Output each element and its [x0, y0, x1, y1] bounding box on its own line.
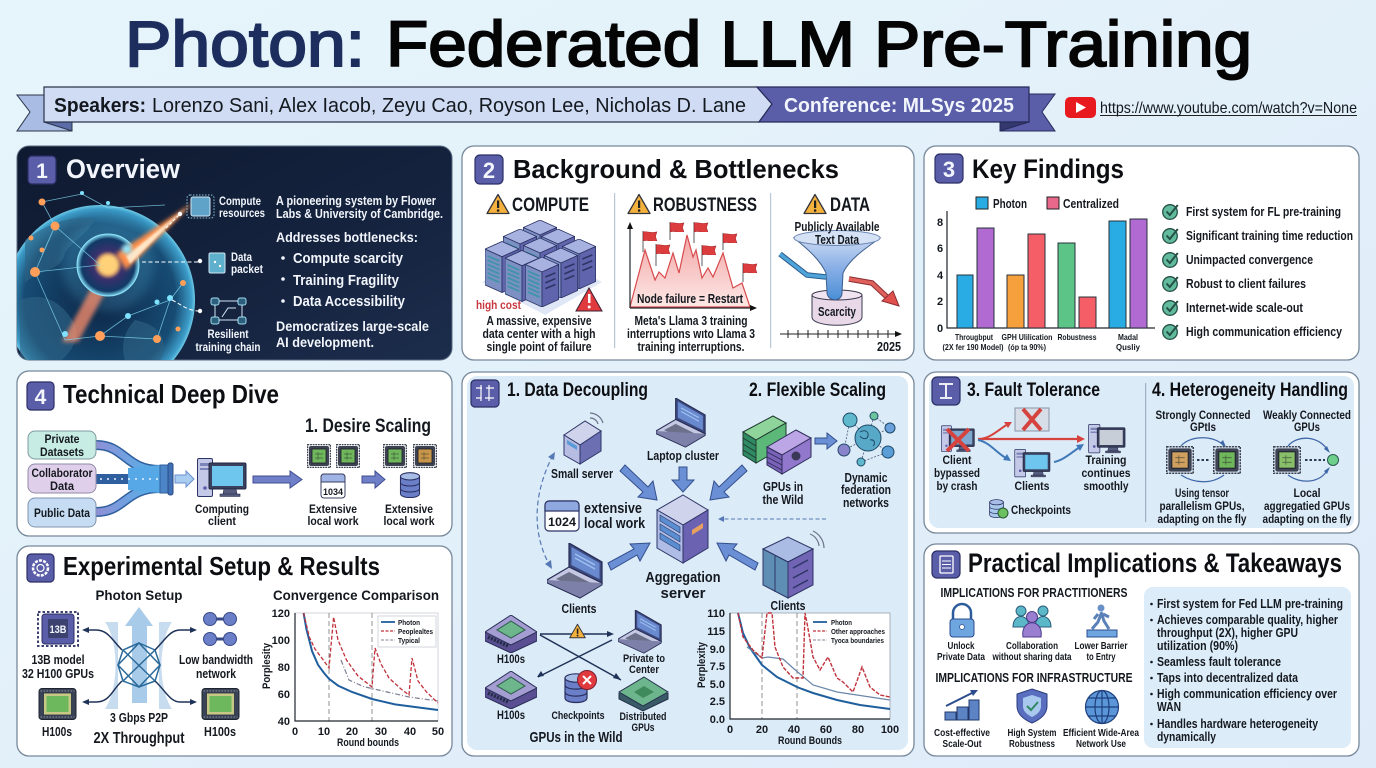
failure chart — [627, 222, 757, 311]
photon setup diagram: 3 Gbps P2P — [110, 711, 168, 725]
perplexity chart: 60 — [820, 724, 832, 736]
convergence chart: 60 — [278, 689, 290, 701]
convergence chart: 80 — [278, 662, 290, 674]
perplexity chart: 115 — [707, 626, 725, 638]
overview description: Training Fragility — [293, 272, 400, 289]
bar chart: 4 — [937, 270, 944, 282]
legend: Other approaches — [831, 627, 885, 636]
takeaways list: Achieves comparable quality, higher — [1157, 613, 1338, 627]
computing client — [195, 458, 249, 528]
conference ribbon — [757, 87, 1055, 131]
fault flow diagram: Client — [942, 453, 972, 467]
calendar icon: 1034 — [323, 487, 344, 498]
legend — [976, 197, 1119, 211]
fault flow diagram: Training — [1086, 453, 1126, 467]
icon: youtube — [1065, 97, 1096, 118]
convergence chart: 20 — [346, 726, 358, 738]
speakers ribbon: Speakers: — [54, 95, 146, 117]
heading: data decoupling: 1. Data Decoupling — [507, 380, 648, 401]
legend: Peoplealtes — [398, 629, 433, 636]
badge clipboard — [932, 551, 960, 578]
convergence chart: 30 — [375, 726, 387, 738]
robustness column — [627, 194, 757, 354]
robustness column: interruptions wıto Llama 3 — [627, 327, 755, 341]
public data box: Public Data — [34, 508, 91, 520]
findings checklist: High communication efficiency — [1186, 325, 1342, 339]
robustness column: training interruptions. — [638, 340, 744, 354]
calendar 1024 and local work: extensive — [584, 500, 642, 517]
small server — [551, 413, 613, 481]
findings checklist: Robust to client failures — [1186, 277, 1306, 291]
perplexity chart: 9.0 — [710, 644, 725, 656]
gpus in the wild diagram: H100s — [497, 654, 525, 666]
icon: red warning — [576, 288, 602, 311]
gpus in the wild diagram: Checkpoints — [552, 710, 604, 722]
overview description: Data Accessibility — [293, 293, 406, 310]
private datasets box: Private — [44, 434, 80, 446]
photon setup diagram: Low bandwidth — [179, 653, 253, 667]
panel: experimental setup and results — [17, 546, 452, 756]
speakers ribbon — [17, 87, 772, 131]
gpus in the wild diagram: Distributed — [620, 711, 666, 723]
heading: overview: Overview — [66, 154, 181, 184]
bar chart: Througbput — [955, 332, 993, 342]
bar chart: Madal — [1118, 332, 1138, 342]
convergence chart: 120 — [272, 608, 290, 620]
bar chart: 0 — [937, 323, 943, 335]
weakly connected: Weakly Connected — [1263, 408, 1351, 422]
bar chart: 2 — [937, 296, 943, 308]
bar chart — [937, 197, 1155, 352]
practitioners: Unlock — [948, 640, 975, 652]
strongly connected — [1156, 408, 1250, 526]
title: Federated LLM Pre-Training — [386, 8, 1252, 80]
laptop cluster — [647, 398, 719, 463]
bar chart: (óp ta 90%) — [1008, 342, 1046, 352]
dynamic federation network: federation — [841, 483, 891, 497]
public data box — [28, 498, 96, 527]
overview description: A pioneering system by Flower — [276, 194, 436, 208]
weakly connected — [1262, 408, 1352, 526]
funnel and cup: Publicly Available — [794, 220, 880, 234]
badge 4 — [27, 382, 54, 410]
infrastructure: IMPLICATIONS FOR INFRASTRUCTURE — [936, 671, 1132, 685]
panel: key findings — [924, 146, 1359, 360]
collaborator data box: Data — [50, 481, 75, 493]
photon setup diagram: 32 H100 GPUs — [22, 667, 94, 681]
compute resources — [187, 194, 265, 220]
heading: background: Background & Bottlenecks — [513, 154, 839, 184]
compute column: data center with a high — [482, 327, 596, 341]
convergence chart: Round bounds — [337, 737, 399, 749]
heading: key findings: Key Findings — [972, 154, 1124, 184]
globe illustration — [17, 191, 202, 360]
small server: Small server — [551, 467, 613, 481]
convergence chart: 40 — [278, 716, 290, 728]
badge 4: 4 — [35, 386, 47, 409]
calendar 1024 and local work: local work — [584, 515, 646, 532]
heading: fault tolerance: 3. Fault Tolerance — [967, 380, 1100, 401]
clients server rack: Clients — [770, 599, 806, 613]
takeaways list: throughput (2X), higher GPU — [1157, 626, 1298, 640]
takeaways list: High communication efficiency over — [1157, 687, 1337, 701]
icon: globe — [1086, 690, 1118, 724]
heading: technical deep dive: Technical Deep Dive — [63, 379, 279, 409]
overview description: Labs & University of Cambridge. — [276, 207, 443, 221]
legend — [378, 616, 436, 647]
bar chart: 6 — [937, 243, 943, 255]
icon: lock — [950, 604, 974, 637]
scaling block: Extensive — [309, 502, 357, 516]
takeaways list: WAN — [1157, 700, 1181, 714]
practitioners: Private Data — [937, 651, 985, 663]
weakly connected: Local — [1294, 486, 1320, 500]
panel: background and bottlenecks — [462, 146, 914, 360]
takeaways list: Seamless fault tolerance — [1157, 655, 1281, 669]
bar chart: GPH Ulilication — [1002, 332, 1052, 342]
dynamic federation network: networks — [843, 496, 889, 510]
photon setup diagram: 2X Throughput — [94, 730, 185, 747]
findings checklist: First system for FL pre-training — [1186, 205, 1341, 219]
practitioners: to Entry — [1086, 651, 1116, 663]
calendar 1024 and local work — [545, 500, 646, 532]
perplexity chart: 0 — [727, 724, 733, 736]
overview description: Democratizes large-scale — [276, 318, 429, 334]
arrows to aggregation server — [608, 465, 758, 570]
crashed client — [941, 426, 974, 452]
takeaways list: Taps into decentralized data — [1157, 671, 1299, 685]
compute column: single point of failure — [486, 340, 592, 354]
convergence chart: 40 — [404, 726, 416, 738]
perplexity chart: Round Bounds — [778, 735, 842, 747]
practitioners — [937, 586, 1128, 663]
gpus in the wild diagram: Center — [629, 664, 660, 676]
private datasets box — [28, 431, 96, 459]
badge 1: 1 — [36, 160, 48, 183]
practitioners: without sharing data — [992, 651, 1072, 663]
panel: technical deep dive — [17, 371, 452, 536]
photon setup diagram: H100s — [204, 725, 236, 739]
conference ribbon: Conference: MLSys 2025 — [784, 95, 1014, 117]
resilient training chain — [196, 298, 260, 354]
crashed node — [1015, 408, 1049, 431]
gpus in the wild diagram: Private to — [623, 653, 665, 665]
gpus in the wild diagram: GPUs in the Wild — [530, 729, 622, 746]
computing client: client — [208, 514, 236, 528]
fault flow diagram: by crash — [936, 479, 978, 493]
overview description: AI development. — [276, 334, 374, 350]
computing client: Computing — [195, 502, 249, 516]
panel: overview — [16, 146, 452, 360]
checkpoints — [990, 500, 1071, 518]
legend: Tyoca boundaries — [831, 636, 884, 645]
resilient training chain: training chain — [196, 340, 260, 354]
heading: experimental: Experimental Setup & Results — [63, 551, 380, 581]
clients laptop — [547, 543, 602, 616]
infrastructure: Cost-effective — [934, 727, 990, 739]
legend — [811, 615, 888, 645]
data source pipes — [96, 445, 173, 512]
arrow — [175, 471, 194, 487]
gpus in the wild stacks — [743, 416, 811, 507]
icon: people — [1013, 606, 1051, 637]
panel: data decoupling and flexible scaling — [462, 372, 914, 756]
perplexity chart: 110 — [707, 608, 725, 620]
failure chart: Node failure = Restart — [637, 292, 744, 306]
arrow to federation — [815, 433, 837, 449]
weakly connected: GPUs — [1294, 420, 1320, 434]
strongly connected: GPtIs — [1190, 420, 1216, 434]
perplexity chart: 20 — [756, 724, 768, 736]
fault flow diagram: smoothly — [1084, 479, 1129, 493]
photon setup diagram: H100s — [42, 725, 72, 739]
robustness column: Meta's Llama 3 training — [634, 314, 748, 328]
gpus in the wild stacks: GPUs in — [763, 480, 803, 494]
takeaways list: utilization (90%) — [1157, 639, 1238, 653]
takeaways list: dynamically — [1157, 730, 1216, 744]
aggregation server: Aggregation — [646, 569, 720, 586]
dynamic federation network — [838, 412, 895, 510]
speakers ribbon: Lorenzo Sani, Alex Iacob, Zeyu Cao, Royson Lee, Nicholas D. Lane — [152, 95, 746, 117]
photon setup diagram: network — [196, 667, 236, 681]
timeline — [780, 330, 902, 354]
icon: failed checkpoint — [578, 670, 596, 690]
data packet: packet — [231, 262, 263, 276]
data column: DATA — [830, 195, 870, 216]
overview description: Addresses bottlenecks: — [276, 229, 418, 245]
photon setup diagram: Photon Setup — [96, 587, 182, 603]
icon: lower barrier — [1087, 604, 1117, 637]
title: Photon: — [125, 8, 365, 80]
photon setup diagram: 13B model — [32, 653, 84, 667]
practitioners: Lower Barrier — [1074, 640, 1128, 652]
low bandwidth icon — [204, 612, 236, 646]
convergence chart: Porplesity — [261, 642, 273, 689]
infrastructure — [934, 671, 1139, 750]
timeline: 2025 — [877, 340, 901, 354]
bar chart: 8 — [937, 217, 943, 229]
distributed gpu chip — [619, 677, 668, 711]
convergence chart: 0 — [292, 726, 298, 738]
resilient training chain: Resilient — [208, 327, 249, 341]
infrastructure: Network Use — [1076, 738, 1126, 750]
badge network — [471, 380, 499, 407]
takeaways list: Handles hardware heterogeneity — [1157, 717, 1318, 731]
legend: Photon — [993, 197, 1027, 211]
fault flow diagram: Clients — [1014, 479, 1050, 493]
compute column — [476, 194, 602, 354]
takeaways list: First system for Fed LLM pre-training — [1157, 597, 1343, 611]
data column — [780, 194, 902, 354]
heading: flexible scaling: 2. Flexible Scaling — [749, 380, 886, 401]
badge 2: 2 — [483, 158, 495, 183]
badge 2 — [475, 155, 503, 184]
gpus in the wild stacks: the Wild — [762, 493, 804, 507]
panel: practical implications — [924, 544, 1359, 756]
legend: Typical — [398, 638, 420, 645]
scaling block — [305, 416, 436, 528]
gpus in the wild diagram — [485, 610, 668, 746]
fault flow diagram: continues — [1082, 466, 1131, 480]
convergence chart — [261, 587, 444, 749]
compute column: COMPUTE — [512, 195, 589, 216]
funnel and cup — [780, 220, 899, 325]
legend: Photon — [398, 620, 420, 627]
dynamic federation network: Dynamic — [844, 471, 888, 485]
scaling block: local work — [384, 514, 435, 528]
badge 3 — [935, 154, 963, 183]
13B chip: 13B — [50, 624, 67, 636]
weakly connected: adapting on the fly — [1262, 512, 1352, 526]
gpus in the wild diagram: H100s — [497, 710, 525, 722]
calendar 1024 and local work: 1024 — [548, 515, 576, 529]
perplexity chart: 100 — [881, 724, 899, 736]
infrastructure: Efficient Wide-Area — [1063, 727, 1139, 739]
findings checklist: Internet-wide scale-out — [1186, 301, 1304, 315]
aggregation server — [646, 495, 720, 602]
scaling block: local work — [308, 514, 359, 528]
perplexity chart: 2.5 — [710, 696, 725, 708]
convergence chart: 10 — [318, 726, 330, 738]
checkpoints: Checkpoints — [1011, 503, 1071, 517]
data packet — [209, 250, 263, 276]
practitioners: IMPLICATIONS FOR PRACTITIONERS — [940, 586, 1128, 600]
scaling block: 1. Desire Scaling — [305, 416, 431, 437]
clients server rack — [763, 531, 824, 613]
convergence chart: Convergence Comparison — [273, 587, 439, 603]
bar chart: Qusliy — [1116, 342, 1140, 352]
bar chart: (2X fer 190 Model) — [942, 342, 1004, 352]
overview description: Compute scarcity — [293, 250, 404, 267]
clients laptop: Clients — [562, 602, 597, 616]
arrow — [253, 471, 302, 488]
convergence chart: 50 — [432, 726, 444, 738]
gpus in the wild diagram: GPUs — [632, 722, 654, 734]
icon: shield — [1017, 689, 1047, 723]
compute resources: Compute — [219, 194, 261, 208]
legend: Photon — [831, 618, 852, 627]
funnel and cup: Scarcity — [818, 305, 856, 319]
robustness column: ROBUSTNESS — [653, 195, 757, 216]
perplexity chart: 0.0 — [710, 714, 725, 726]
weakly connected: aggregatied GPUs — [1264, 499, 1350, 513]
perplexity chart: 5.0 — [710, 679, 725, 691]
funnel and cup: Text Data — [815, 233, 860, 247]
scaling block: Extensive — [385, 502, 433, 516]
13B chip — [38, 612, 78, 646]
dashed double arrow — [537, 452, 555, 569]
compute column: A massive, expensive — [486, 314, 592, 328]
takeaways list — [1144, 587, 1351, 748]
fault flow diagram — [934, 408, 1131, 518]
perplexity chart: 80 — [852, 724, 864, 736]
strongly connected: parallelism GPUs, — [1160, 499, 1244, 513]
convergence chart: 100 — [272, 635, 290, 647]
dashed return arrow — [718, 516, 826, 522]
collaborator data box: Collaborator — [32, 468, 93, 480]
findings checklist — [1163, 205, 1353, 339]
bar chart: Robustness — [1058, 332, 1097, 342]
practitioners: Collaboration — [1006, 640, 1058, 652]
fault flow diagram: bypassed — [934, 466, 980, 480]
perplexity chart: 40 — [788, 724, 800, 736]
photon setup diagram — [22, 587, 253, 747]
panel: fault tolerance and heterogeneity — [924, 372, 1359, 533]
perplexity chart — [696, 608, 899, 747]
high cost label: high cost — [476, 298, 521, 312]
icon: growth — [945, 690, 979, 720]
badge 1 — [28, 156, 56, 184]
legend: Centralized — [1063, 197, 1119, 211]
overview description — [276, 194, 443, 350]
private datasets box: Datasets — [40, 447, 84, 459]
strongly connected: Using tensor — [1175, 486, 1229, 500]
perplexity chart: 7.5 — [710, 661, 725, 673]
collaborator data box — [28, 464, 96, 493]
aggregation server: server — [660, 585, 706, 602]
strongly connected: Strongly Connected — [1156, 408, 1250, 422]
findings checklist: Unimpacted convergence — [1186, 253, 1313, 267]
data packet: Data — [231, 250, 252, 264]
mesh — [118, 643, 160, 687]
compute resources: resources — [219, 206, 265, 220]
badge fault tolerance — [932, 377, 960, 405]
infrastructure: Robustness — [1009, 738, 1055, 750]
infrastructure: High System — [1008, 727, 1056, 739]
laptop cluster: Laptop cluster — [647, 449, 719, 463]
badge gear — [27, 554, 54, 582]
strongly connected: adapting on the fly — [1158, 512, 1247, 526]
infrastructure: Scale-Out — [942, 738, 982, 750]
perplexity chart: Perplexity — [696, 641, 708, 688]
badge 3: 3 — [943, 157, 955, 182]
